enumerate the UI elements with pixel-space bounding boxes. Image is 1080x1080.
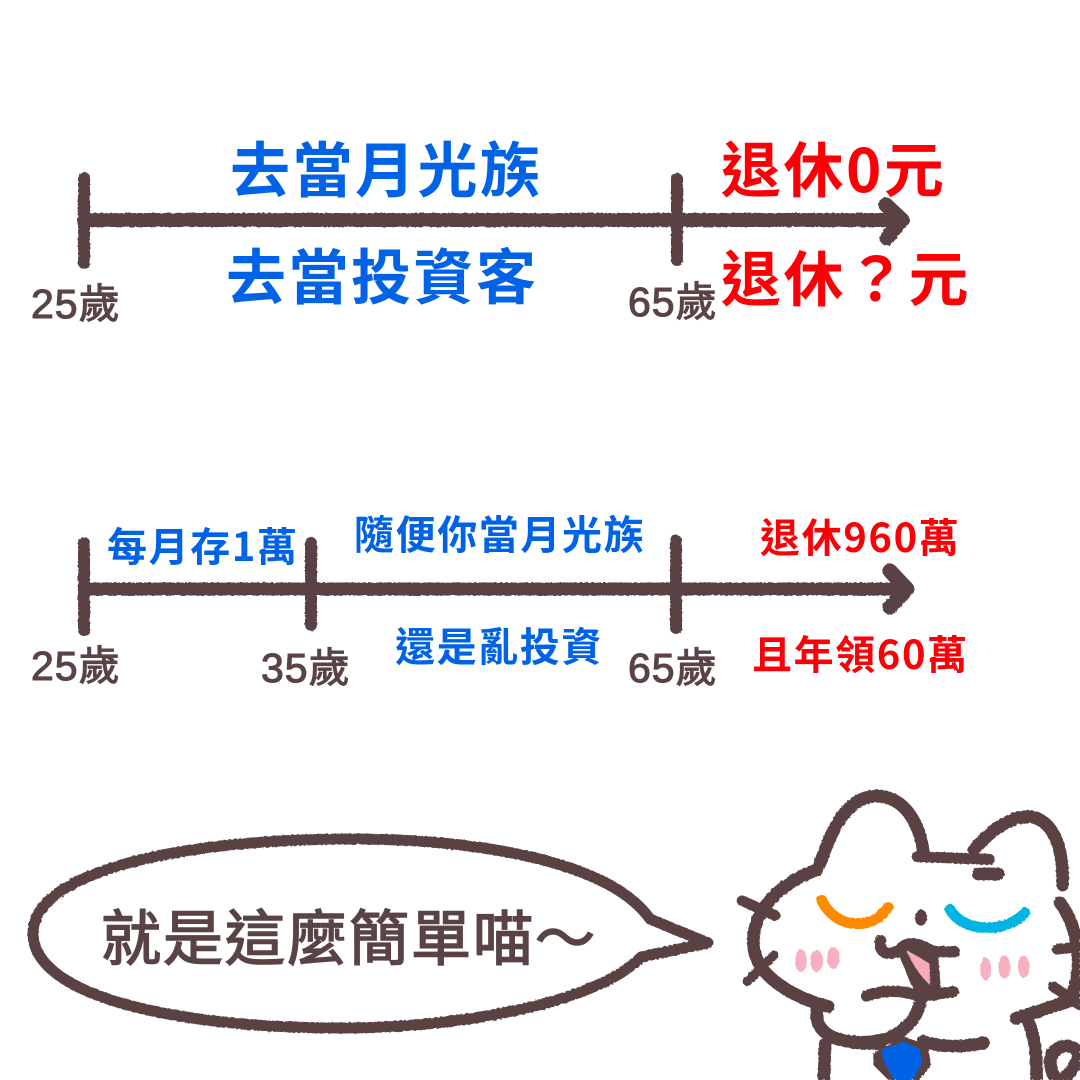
tick: age 65 xyxy=(671,179,683,260)
axis line 2 xyxy=(85,582,905,596)
age label 25: 25歲 xyxy=(31,643,121,689)
cat eye: blue xyxy=(950,909,1025,928)
tick: age 65 xyxy=(670,541,682,628)
cat head outline xyxy=(742,796,1080,1007)
age label 65: 65歲 xyxy=(628,645,718,691)
cat blue tie xyxy=(873,1037,931,1080)
heading: 去當月光族: 去當月光族 xyxy=(230,123,542,210)
speech text: 就是這麼簡單喵～ xyxy=(101,891,597,978)
cat nose xyxy=(915,910,927,926)
cat blush xyxy=(795,947,1029,980)
age label 65: 65歲 xyxy=(628,279,718,325)
tick: age 25 xyxy=(78,178,90,263)
outcome: 退休0元: 退休0元 xyxy=(721,123,946,210)
label: 每月存1萬: 每月存1萬 xyxy=(107,515,299,573)
label: 隨便你當月光族: 隨便你當月光族 xyxy=(354,503,645,561)
age label 35: 35歲 xyxy=(261,645,351,691)
cat chin and body xyxy=(817,998,1078,1080)
axis line 1 xyxy=(84,213,900,227)
cat mouth and tongue xyxy=(867,941,954,997)
heading: 去當投資客: 去當投資客 xyxy=(226,230,538,317)
arrowhead 1 xyxy=(886,205,902,238)
cat eye: orange xyxy=(822,900,888,924)
age label 25: 25歲 xyxy=(31,281,121,327)
outcome: 退休?元: 退休？元 xyxy=(721,232,971,319)
outcome: 退休960萬: 退休960萬 xyxy=(760,506,960,564)
tick: age 35 xyxy=(305,543,317,625)
outcome: 且年領60萬: 且年領60萬 xyxy=(752,623,969,681)
tick: age 25 xyxy=(78,543,90,630)
label: 還是亂投資: 還是亂投資 xyxy=(395,615,603,673)
arrowhead 2 xyxy=(890,571,907,607)
